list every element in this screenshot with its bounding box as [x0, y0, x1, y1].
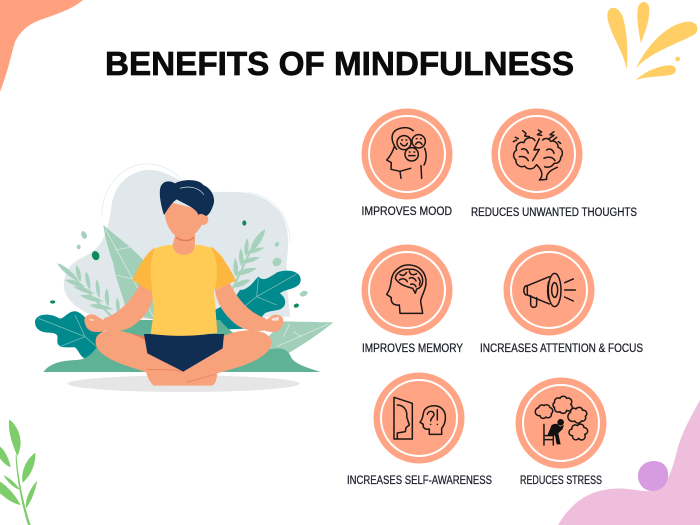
right sprig — [231, 229, 265, 290]
teal leaf right vein — [240, 274, 297, 310]
person back arms inner shadow — [113, 328, 257, 350]
badge ring — [369, 116, 445, 192]
benefit: reduces stress — [516, 378, 606, 487]
label: IMPROVES MEMORY — [362, 343, 463, 355]
icon: head with emotion faces — [387, 128, 426, 178]
back leaf left — [103, 225, 157, 320]
ground hill — [43, 320, 321, 372]
badge circle — [362, 244, 452, 336]
benefit: improves mood — [362, 108, 452, 218]
hair — [160, 180, 214, 216]
icon: megaphone — [524, 273, 575, 307]
icon: mirror and head — [394, 397, 445, 439]
back leaf veins — [105, 228, 153, 317]
pale leaf right veins — [277, 323, 328, 347]
title: BENEFITS OF MINDFULNESS — [105, 46, 574, 83]
badge ring — [499, 116, 575, 192]
badge ring — [381, 380, 457, 456]
benefit: improves memory — [362, 244, 463, 355]
decoration: coral corner blob — [0, 0, 83, 92]
illustration: meditating person — [35, 164, 333, 392]
badge ring — [511, 252, 587, 328]
badge circle — [374, 372, 464, 464]
t-shirt sleeve shade right — [211, 246, 236, 290]
left hand — [84, 314, 108, 332]
badge ring — [369, 252, 445, 328]
decoration: purple dot — [638, 461, 668, 491]
teal leaf left — [35, 311, 107, 359]
icon: head with brain — [387, 265, 426, 313]
background blob — [64, 170, 290, 320]
badge circle — [504, 244, 594, 336]
badge circle — [362, 108, 452, 200]
decoration: pink wave — [558, 400, 700, 525]
label: REDUCES STRESS — [520, 475, 602, 487]
decoration: yellow splash — [607, 2, 698, 80]
left arm — [103, 283, 154, 331]
icon: stressed person with thought clouds — [535, 396, 588, 445]
t-shirt sleeve shade left — [132, 247, 155, 292]
blob outline — [102, 164, 290, 243]
hand highlights — [88, 317, 279, 321]
neck — [173, 232, 195, 255]
floor shadow — [68, 375, 300, 392]
label: REDUCES UNWANTED THOUGHTS — [471, 207, 637, 219]
pale leaf right — [268, 321, 333, 357]
left sprig — [57, 263, 120, 321]
label: INCREASES SELF-AWARENESS — [347, 475, 492, 487]
feet — [146, 369, 217, 386]
teal leaf left vein — [38, 315, 97, 347]
small dots and drops — [50, 220, 308, 308]
decoration: green leaves — [0, 419, 37, 525]
face — [165, 202, 202, 238]
t-shirt — [132, 245, 236, 336]
foot crease — [147, 369, 217, 382]
right hand — [262, 315, 283, 332]
label: IMPROVES MOOD — [362, 206, 452, 218]
benefit: reduces unwanted thoughts — [471, 108, 637, 219]
neck shadow — [176, 237, 194, 241]
right arm — [215, 283, 267, 331]
shorts — [144, 334, 224, 372]
hair highlight — [180, 187, 204, 195]
ear — [197, 214, 208, 225]
icon: cracked brain — [513, 130, 562, 180]
badge circle — [492, 108, 582, 200]
teal leaf right — [215, 271, 301, 330]
badge circle — [516, 378, 606, 468]
benefit: increases attention and focus — [480, 244, 643, 355]
label: INCREASES ATTENTION & FOCUS — [480, 343, 643, 355]
badge ring — [523, 385, 599, 461]
legs — [96, 330, 271, 383]
benefit: increases self-awareness — [347, 372, 492, 487]
